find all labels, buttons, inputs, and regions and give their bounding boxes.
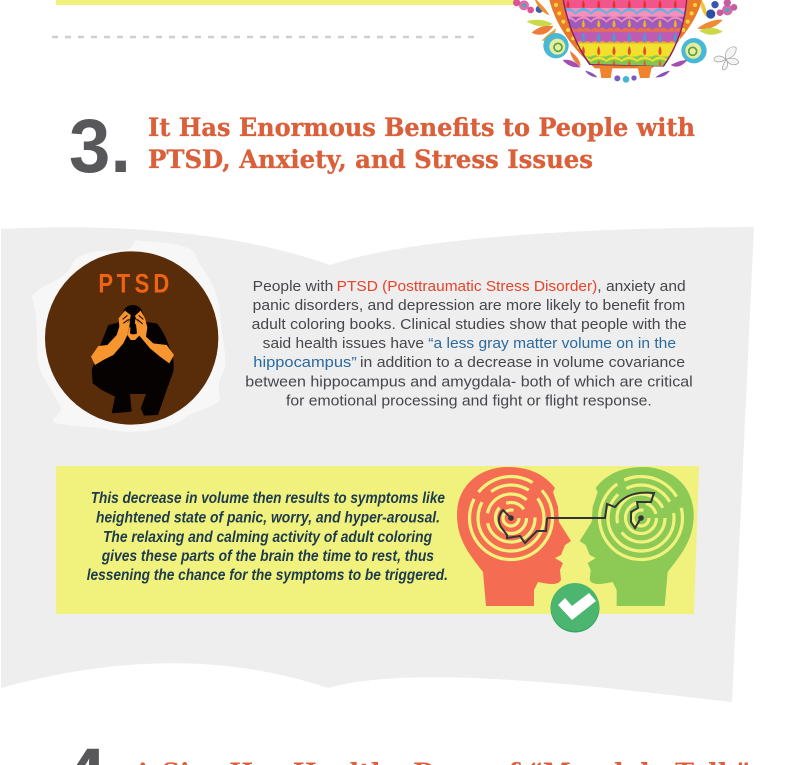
number 3: 3. <box>69 104 131 189</box>
yellow strip from previous section <box>56 0 516 5</box>
text block: callout text: lessening the chance for the symptoms to be triggered. <box>87 567 448 584</box>
text block: intro paragraph: “a less gray matter volume on in the <box>428 335 676 352</box>
text block: intro paragraph <box>245 278 693 410</box>
left ornaments <box>519 0 529 10</box>
text block: intro paragraph: People with <box>253 278 333 295</box>
text block: intro paragraph: in addition to a decrease in volume covariance <box>360 354 685 371</box>
text block: intro paragraph: between hippocampus and amygdala- both of which are critical <box>245 374 693 390</box>
text block: intro paragraph: adult coloring books. Clinical studies show that people with the <box>252 316 687 333</box>
text block: intro paragraph: PTSD (Posttraumatic Stress Disorder) <box>337 278 597 295</box>
icon: PTSD badge <box>32 240 225 432</box>
text block: intro paragraph: for emotional processing and fight or flight response. <box>286 392 652 410</box>
PTSD label: PTSD <box>98 269 169 299</box>
text block: callout text: This decrease in volume then results to symptoms like <box>91 490 445 507</box>
heading title: It Has Enormous Benefits to People with <box>148 113 695 142</box>
dashed divider <box>52 36 478 38</box>
panel: yellow callout <box>56 466 699 614</box>
text block: intro paragraph: , anxiety and <box>597 278 686 295</box>
text block: intro paragraph: said health issues have <box>263 335 424 352</box>
text block: callout text <box>87 490 448 584</box>
icon: two heads with maze <box>457 467 694 606</box>
butterfly <box>714 47 738 70</box>
text block: intro paragraph: hippocampus” <box>253 354 357 371</box>
red head <box>457 467 571 606</box>
text block: callout text: gives these parts of the brain the time to rest, thus <box>101 548 434 565</box>
text block: callout text: The relaxing and calming activity of adult coloring <box>103 529 432 546</box>
right ornaments <box>722 5 733 15</box>
crouching man <box>91 305 174 416</box>
green head <box>547 467 694 606</box>
heading: section 4 (cropped) <box>64 733 750 765</box>
text block: callout text: heightened state of panic, worry, and hyper-arousal. <box>96 510 440 526</box>
icon: mandala hot air balloon <box>513 0 738 83</box>
panel: open book background <box>1 227 754 702</box>
heading: section 3 <box>69 104 695 189</box>
heading title: PTSD, Anxiety, and Stress Issues <box>148 145 593 174</box>
heading title <box>148 113 695 174</box>
icon: green check badge <box>550 583 600 632</box>
text block: intro paragraph: panic disorders, and depression are more likely to benefit from <box>253 297 685 314</box>
